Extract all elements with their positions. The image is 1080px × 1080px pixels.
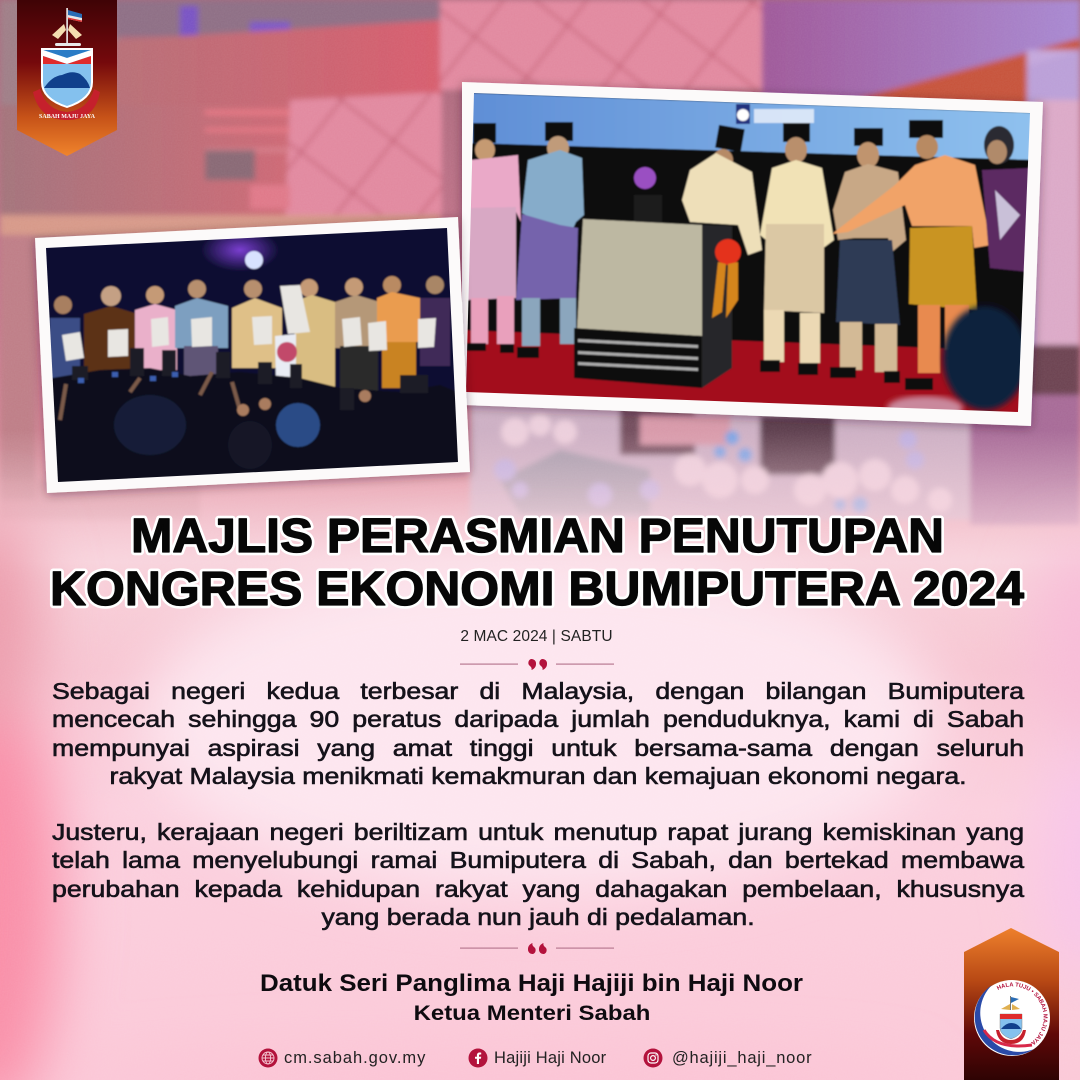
speaker name: Datuk Seri Panglima Haji Hajiji bin Haji Noor [260, 970, 803, 997]
colourful banner [275, 334, 297, 386]
photo: leaders holding documents before press photographers [30, 214, 476, 501]
man in tan [830, 128, 906, 383]
monument with plinth [574, 219, 732, 388]
paragraph one: rakyat Malaysia menikmati kemakmuran dan kemajuan ekonomi negara. [109, 763, 967, 789]
paragraph two: perubahan kepada kehidupan rakyat yang dahagakan pembelaan, khususnya [52, 876, 1024, 902]
man in pink [466, 123, 521, 353]
title: KONGRES EKONOMI BUMIPUTERA 2024 [50, 563, 1024, 616]
crowd of photographers [50, 348, 465, 490]
icon: facebook [468, 1048, 488, 1068]
paragraph two [52, 819, 1024, 930]
man in light blue [516, 122, 584, 358]
opening quote divider [460, 659, 614, 670]
man in cream [760, 123, 834, 375]
badge: Sabah coat of arms: SABAH MAJU JAYA [39, 114, 96, 120]
instagram handle: @hajiji_haji_noor [672, 1049, 812, 1067]
paragraph two: telah lama menyelubungi ramai Bumiputera di Sabah, dan bertekad membawa [52, 847, 1024, 873]
paragraph one: Sebagai negeri kedua terbesar di Malaysia, dengan bilangan Bumiputera [52, 678, 1024, 704]
icon: website globe [258, 1048, 278, 1068]
title: KONGRES EKONOMI BUMIPUTERA 2024 [50, 563, 1024, 616]
photo: ceremony with leaders launching the monument [456, 78, 1049, 433]
paragraph one: mencecah sehingga 90 peratus daripada jumlah penduduknya, kami di Sabah [52, 706, 1024, 732]
badge: Sabah coat of arms [17, 0, 117, 156]
logo: Malaysia Madani [736, 104, 814, 124]
man in purple batik [982, 126, 1030, 272]
speaker role: Ketua Menteri Sabah [414, 1002, 650, 1025]
title: MAJLIS PERASMIAN PENUTUPAN [131, 510, 944, 563]
icon: instagram [644, 1048, 662, 1068]
row of leaders [50, 276, 450, 402]
footer contact row [258, 1048, 812, 1068]
stage spotlight [634, 167, 662, 225]
red ribbon [712, 239, 741, 318]
title: MAJLIS PERASMIAN PENUTUPAN [131, 510, 944, 563]
blurred foreground head [887, 306, 1027, 420]
facebook name: Hajiji Haji Noor [494, 1049, 606, 1067]
paragraph one: mempunyai aspirasi yang amat tinggi untuk bersama-sama dengan seluruh [52, 735, 1024, 761]
man in cream bending over [682, 125, 762, 255]
paragraph one [52, 678, 1024, 790]
closing quote divider [460, 943, 614, 954]
documents held up [62, 285, 436, 361]
date line: 2 MAC 2024 | SABTU [460, 628, 613, 645]
man in orange pointing [832, 120, 991, 390]
paragraph two: Justeru, kerajaan negeri beriltizam untuk menutup rapat jurang kemiskinan yang [52, 819, 1024, 845]
paragraph two: yang berada nun jauh di pedalaman. [321, 904, 755, 930]
badge: Hala Tuju Sabah Maju Jaya: HALA TUJU • SABAH MAJU JAYA [996, 982, 1048, 1045]
flower stage under photos [470, 395, 970, 520]
website address: cm.sabah.gov.my [284, 1049, 426, 1067]
badge: Hala Tuju Sabah Maju Jaya [964, 928, 1059, 1080]
